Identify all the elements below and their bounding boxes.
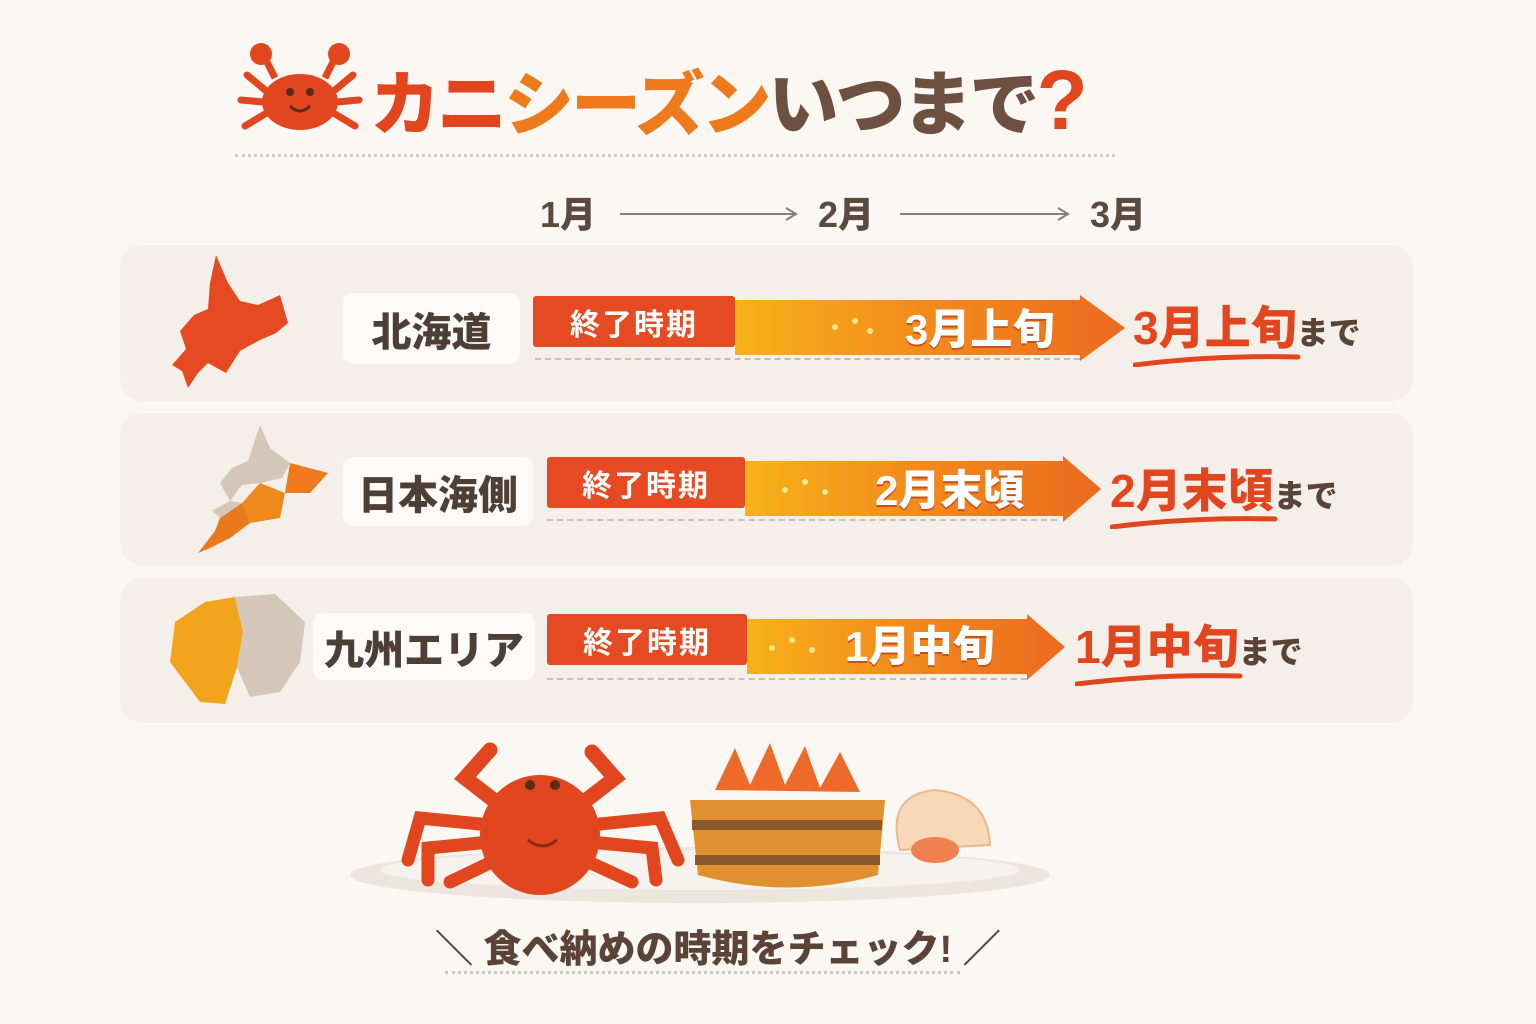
arrow bar	[745, 456, 1101, 522]
panel: Sea of Japan side: 2月末頃	[875, 467, 1024, 514]
badge: 終了時期	[582, 470, 710, 502]
badge	[533, 296, 735, 347]
icon: Kyushu map	[170, 594, 305, 704]
icon: crab	[238, 43, 362, 130]
crab	[408, 750, 678, 895]
badge: 終了時期	[583, 626, 711, 660]
region label	[343, 293, 520, 364]
region label: 北海道	[372, 310, 492, 354]
result: 2月末頃まで	[1110, 465, 1338, 517]
region label	[343, 457, 533, 526]
tagline: ＼ 食べ納めの時期をチェック! ／	[435, 929, 1001, 971]
region label: 九州エリア	[324, 628, 524, 672]
panel: Kyushu	[120, 578, 1413, 723]
tub with legs	[715, 743, 860, 792]
region label: 日本海側	[358, 474, 518, 518]
result: 1月中旬まで	[1075, 621, 1303, 673]
month axis: 1月	[540, 194, 596, 235]
icon: Hokkaido map	[172, 255, 288, 388]
panel: Hokkaido: 3月上旬	[905, 306, 1054, 353]
title	[238, 43, 1085, 147]
arrow bar	[735, 295, 1125, 361]
badge: 終了時期	[570, 308, 698, 342]
illustration: crab platter	[350, 742, 1050, 903]
badge	[547, 457, 745, 508]
shell	[897, 790, 990, 850]
panel: Kyushu: 1月中旬	[845, 623, 994, 670]
title text: カニシーズンいつまで?	[370, 53, 1085, 147]
month axis: 3月	[1090, 194, 1146, 235]
arrow bar	[747, 614, 1065, 680]
month axis	[540, 194, 1146, 235]
result: 3月上旬まで	[1133, 302, 1361, 354]
panel: Sea of Japan side	[120, 413, 1413, 565]
badge	[547, 614, 747, 665]
panel: Hokkaido	[120, 245, 1413, 401]
month axis: 2月	[818, 194, 874, 235]
icon: Japan map	[198, 425, 328, 553]
region label	[313, 613, 535, 680]
